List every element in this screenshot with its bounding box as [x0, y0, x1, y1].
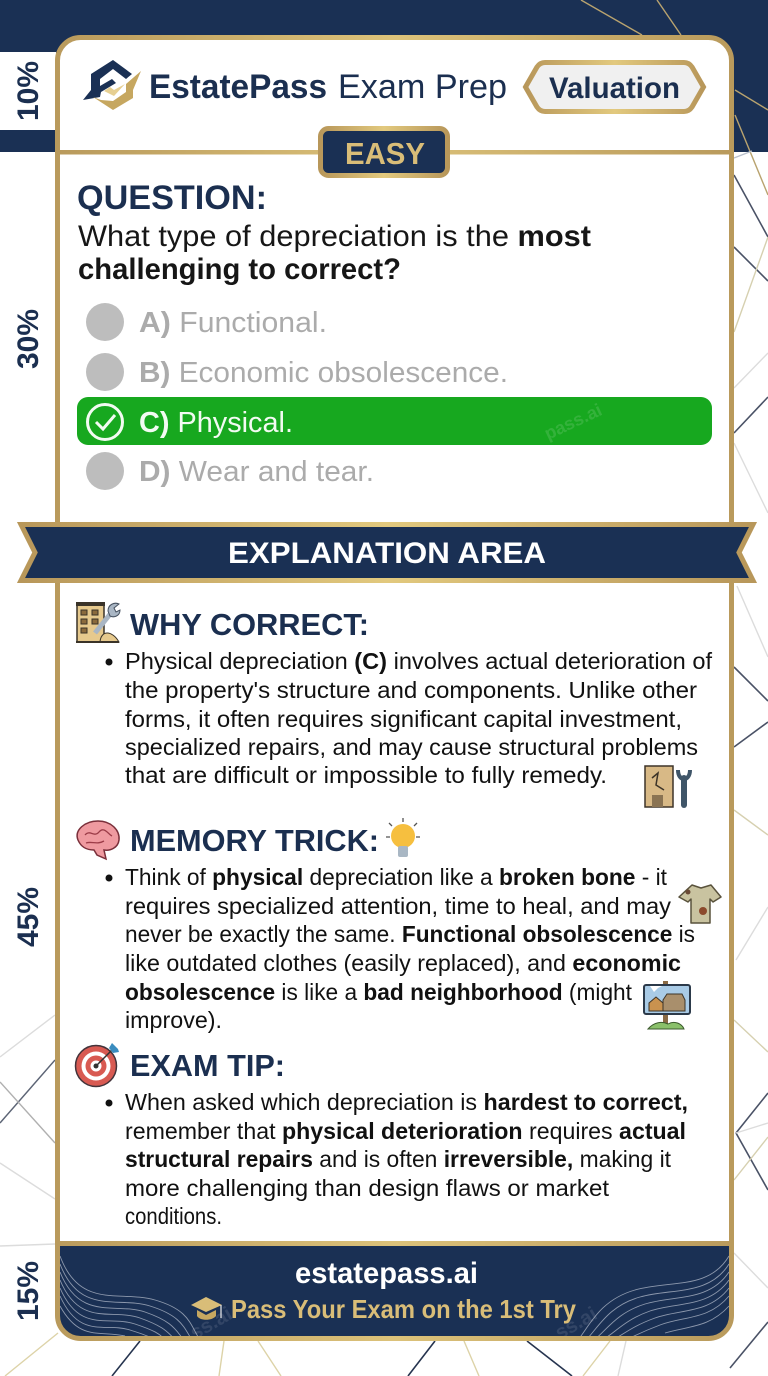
option D — [86, 452, 374, 490]
memory trick text: Think of physical depreciation like a broken bone - it — [125, 864, 668, 890]
icon: neighborhood billboard — [644, 981, 690, 1029]
logo icon — [83, 60, 141, 110]
exam tip text: structural repairs and is often irreversible, making it — [125, 1146, 672, 1172]
option A: A) Functional. — [139, 307, 327, 339]
side label: 15%: 15% — [12, 1261, 45, 1321]
category badge: Valuation: Valuation — [549, 72, 680, 105]
why correct text: that are difficult or impossible to fully remedy. — [125, 762, 607, 788]
footer wave lines — [60, 1256, 729, 1340]
why correct text — [106, 648, 713, 788]
question text: What type of depreciation is the most — [78, 220, 591, 253]
option D: D) Wear and tear. — [139, 456, 374, 488]
exam tip text — [106, 1089, 688, 1229]
brand name: EstatePass — [149, 68, 327, 106]
side label: 45%: 45% — [12, 887, 45, 947]
footer panel — [60, 1246, 729, 1336]
footer watermarks — [192, 1306, 598, 1336]
question text: challenging to correct? — [78, 253, 401, 286]
why correct text: forms, it often requires significant capital investment, — [125, 706, 682, 732]
brand name: Exam Prep — [338, 68, 507, 106]
heading: memory trick: MEMORY TRICK: — [130, 823, 379, 858]
footer tagline: Pass Your Exam on the 1st Try — [231, 1294, 576, 1324]
icon: cracked wall and wrench — [645, 766, 690, 807]
icon: light bulb — [386, 818, 420, 857]
question text — [78, 220, 591, 286]
option B: B) Economic obsolescence. — [139, 357, 508, 389]
icon: target with dart — [76, 1043, 119, 1086]
option A — [86, 303, 327, 341]
footer website: estatepass.ai — [295, 1257, 478, 1290]
exam tip text: more challenging than design flaws or market — [125, 1175, 610, 1201]
memory trick text: obsolescence is like a bad neighborhood (might — [125, 979, 633, 1005]
header divider — [58, 150, 731, 154]
explanation ribbon: EXPLANATION AREA — [228, 537, 546, 570]
icon: graduation cap — [191, 1297, 222, 1320]
category badge: Valuation — [526, 62, 704, 112]
why correct text: specialized repairs, and may cause structural problems — [125, 734, 698, 760]
option C correct — [77, 397, 712, 445]
footer watermarks: ss.ai — [552, 1303, 601, 1344]
why correct text: the property's structure and components. Unlike other — [125, 677, 697, 703]
exam tip text: remember that physical deterioration requires actual — [125, 1118, 686, 1144]
side label: 30%: 30% — [12, 309, 45, 369]
question heading: QUESTION: — [77, 179, 267, 217]
exam tip text: conditions. — [125, 1203, 222, 1229]
difficulty badge: EASY: EASY — [345, 136, 425, 171]
memory trick text: requires specialized attention, time to heal, and may — [125, 893, 672, 919]
icon: brain — [77, 821, 119, 859]
side strip: 10%: 10% — [12, 61, 45, 121]
memory trick text: never be exactly the same. Functional obsolescence is — [125, 921, 695, 947]
explanation ribbon — [21, 524, 753, 580]
footer divider — [58, 1241, 731, 1246]
side strip: 10% — [0, 52, 56, 130]
why correct text: Physical depreciation (C) involves actual deterioration of — [125, 648, 713, 674]
icon: building and wrench — [76, 602, 120, 643]
memory trick text: like outdated clothes (easily replaced), and economic — [125, 950, 681, 976]
watermark: pass.ai — [541, 400, 605, 444]
memory trick text — [106, 864, 695, 1033]
memory trick text: improve). — [125, 1007, 222, 1033]
footer watermarks: ss.ai — [186, 1303, 236, 1344]
difficulty badge: EASY — [320, 128, 448, 176]
option C correct: C) Physical. — [139, 407, 293, 439]
icon: worn shirt — [679, 885, 721, 923]
heading: exam tip: EXAM TIP: — [130, 1048, 285, 1083]
brand name — [149, 68, 507, 106]
heading: why correct: WHY CORRECT: — [130, 607, 369, 642]
exam tip text: When asked which depreciation is hardest to correct, — [125, 1089, 688, 1115]
icon: check circle — [88, 404, 122, 440]
